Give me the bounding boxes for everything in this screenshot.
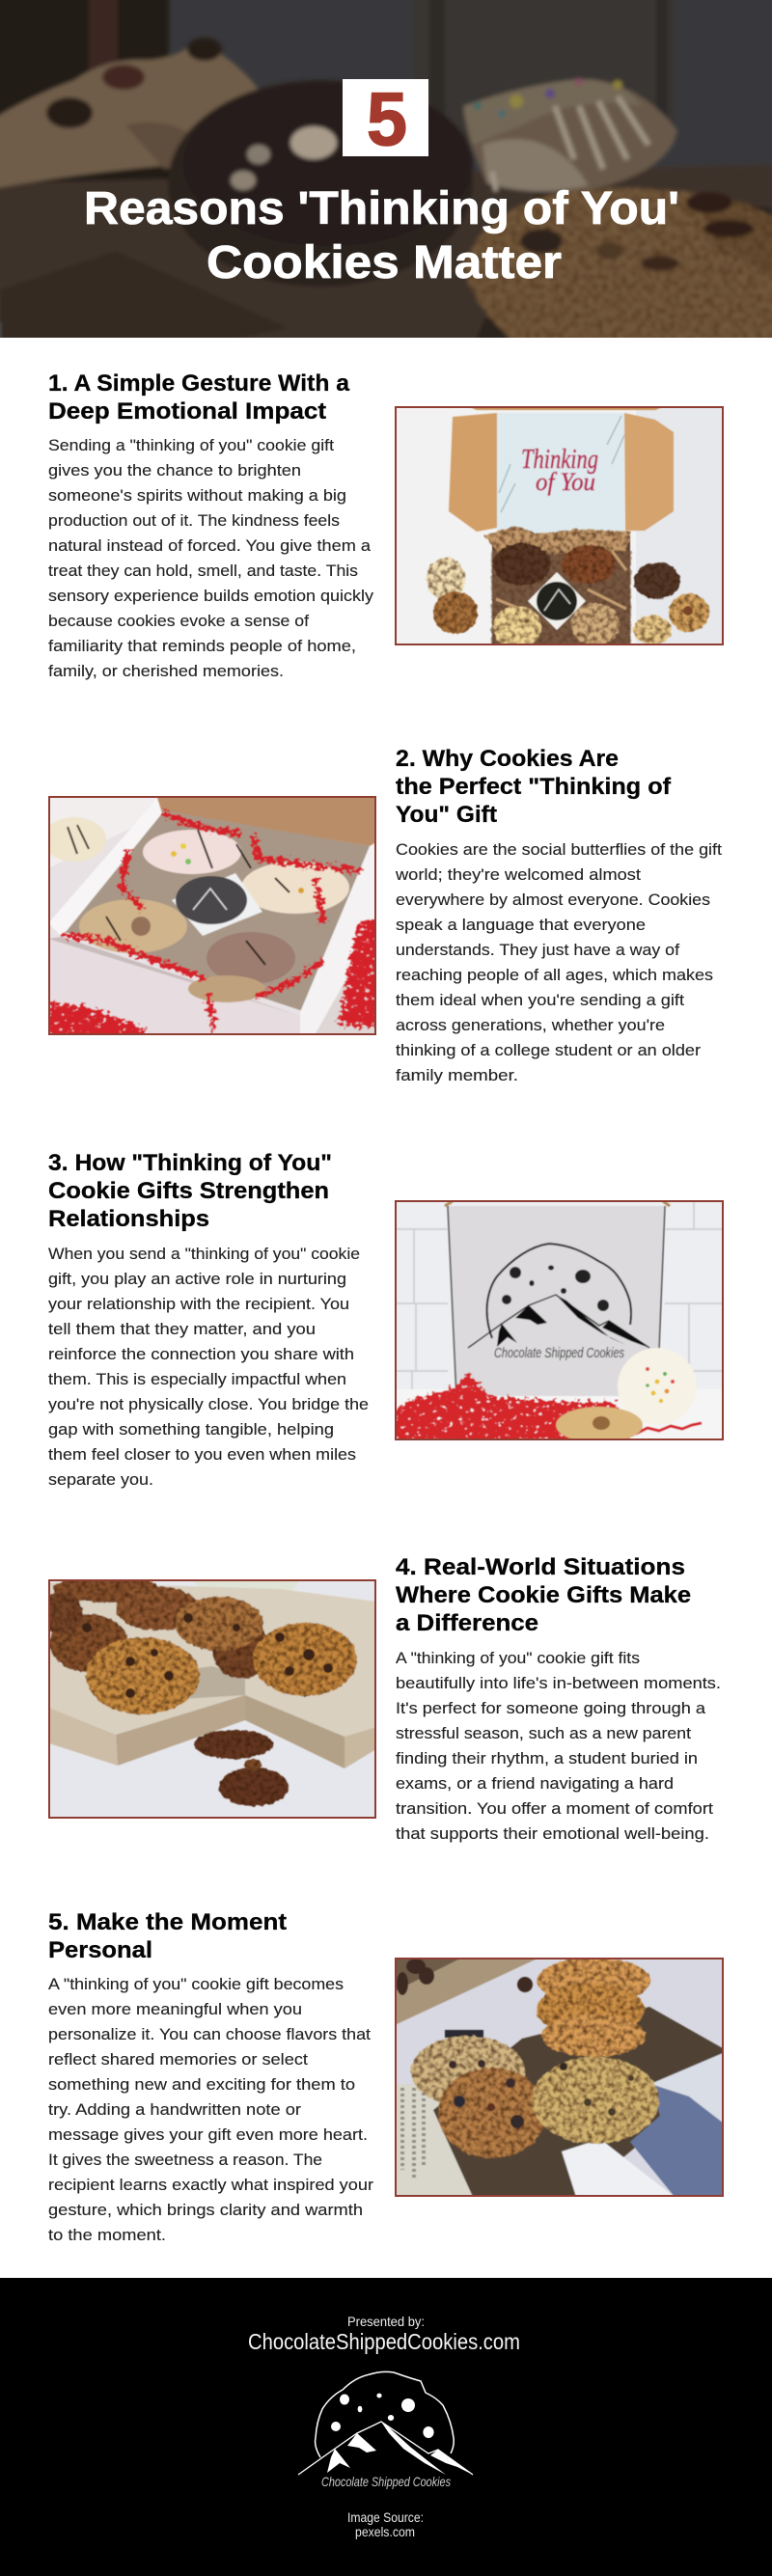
body text 4: transition. You offer a moment of comfort xyxy=(396,1799,713,1818)
body text 5: A "thinking of you" cookie gift becomes xyxy=(48,1975,344,1993)
panel: section 4 xyxy=(41,1554,721,1843)
photo: open box with red crinkle paper xyxy=(48,796,376,1035)
body text 1: natural instead of forced. You give them a xyxy=(48,536,372,555)
title: Reasons 'Thinking of You' xyxy=(84,183,679,234)
photo: white box with logo: Chocolate Shipped Cookies xyxy=(494,1345,624,1361)
heading 4: a Difference xyxy=(396,1610,538,1636)
photo: white box with logo xyxy=(395,1200,724,1440)
body text 1 xyxy=(48,436,374,680)
body text 3: them feel closer to you even when miles xyxy=(48,1445,356,1464)
body text 3: them. This is especially impactful when xyxy=(48,1370,346,1388)
body text 3: you're not physically close. You bridge the xyxy=(48,1395,369,1413)
body text 5 xyxy=(48,1975,373,2244)
body text 4: finding their rhythm, a student buried in xyxy=(396,1749,698,1768)
heading 2: 2. Why Cookies Are xyxy=(396,746,619,772)
body text 5: try. Adding a handwritten note or xyxy=(48,2100,301,2119)
heading 2: the Perfect "Thinking of xyxy=(396,774,672,800)
heading 4: Where Cookie Gifts Make xyxy=(396,1582,691,1608)
body text 3: When you send a "thinking of you" cookie xyxy=(48,1245,360,1263)
body text 3: separate you. xyxy=(48,1470,153,1489)
body text 3: tell them that they matter, and you xyxy=(48,1320,316,1338)
photo: cookies on stone slabs xyxy=(48,1579,376,1819)
presented by label: Presented by: xyxy=(347,2314,425,2329)
heading 5: Personal xyxy=(48,1937,152,1963)
body text 3: gap with something tangible, helping xyxy=(48,1420,334,1439)
body text 2: thinking of a college student or an older xyxy=(396,1041,701,1059)
body text 4: stressful season, such as a new parent xyxy=(396,1724,691,1742)
body text 4: A "thinking of you" cookie gift fits xyxy=(396,1649,640,1667)
heading 4: 4. Real-World Situations xyxy=(396,1554,685,1580)
body text 5: to the moment. xyxy=(48,2226,166,2244)
body text 5: It gives the sweetness a reason. The xyxy=(48,2151,322,2169)
body text 2: Cookies are the social butterflies of the gift xyxy=(396,840,722,859)
body text 5: gesture, which brings clarity and warmth xyxy=(48,2201,363,2219)
body text 2: them ideal when you're sending a gift xyxy=(396,991,684,1009)
logo: cookie and mountains xyxy=(298,2371,473,2475)
body text 1: production out of it. The kindness feels xyxy=(48,511,340,530)
body text 3: reinforce the connection you share with xyxy=(48,1345,354,1363)
body text 5: personalize it. You can choose flavors that xyxy=(48,2025,371,2043)
heading 2 xyxy=(396,746,672,828)
body text 2: world; they're welcomed almost xyxy=(395,865,641,884)
logo wordmark: Chocolate Shipped Cookies xyxy=(321,2474,451,2489)
body text 5: reflect shared memories or select xyxy=(48,2050,308,2069)
body text 3: your relationship with the recipient. You xyxy=(48,1295,349,1313)
body text 2: speak a language that everyone xyxy=(396,916,646,934)
number badge: 5 xyxy=(367,76,407,161)
image source credit xyxy=(347,2509,424,2539)
body text 2: understands. They just have a way of xyxy=(396,941,679,959)
image source credit: pexels.com xyxy=(355,2524,415,2539)
body text 1: familiarity that reminds people of home, xyxy=(48,637,356,655)
photo: stacked cookies with blue towel xyxy=(395,1958,724,2197)
body text 3: gift, you play an active role in nurturing xyxy=(48,1270,346,1288)
body text 5: even more meaningful when you xyxy=(48,2000,302,2018)
body text 4 xyxy=(396,1649,721,1843)
body text 1: because cookies evoke a sense of xyxy=(48,612,309,630)
body text 2: family member. xyxy=(396,1066,518,1084)
body text 2: everywhere by almost everyone. Cookies xyxy=(396,891,710,909)
body text 5: message gives your gift even more heart. xyxy=(48,2125,368,2144)
heading 2: You" Gift xyxy=(396,802,497,828)
body text 4: beautifully into life's in-between moments. xyxy=(396,1674,721,1692)
heading 3: 3. How "Thinking of You" xyxy=(48,1150,332,1176)
body text 4: It's perfect for someone going through a xyxy=(396,1699,706,1717)
body text 5: recipient learns exactly what inspired your xyxy=(48,2176,373,2194)
heading 5 xyxy=(48,1909,287,1963)
photo: thinking of you gift box: of You xyxy=(536,468,595,496)
heading 5: 5. Make the Moment xyxy=(48,1909,287,1935)
body text 1: sensory experience builds emotion quickly xyxy=(48,587,374,605)
title: Cookies Matter xyxy=(207,237,562,288)
heading 1: 1. A Simple Gesture With a xyxy=(48,370,350,397)
image source credit: Image Source: xyxy=(347,2509,424,2525)
panel: section 2 xyxy=(42,746,722,1084)
body text 1: family, or cherished memories. xyxy=(48,662,284,680)
header photo: cookies on wooden board xyxy=(0,0,772,338)
heading 3: Relationships xyxy=(48,1206,209,1232)
heading 3: Cookie Gifts Strengthen xyxy=(48,1178,329,1204)
number badge xyxy=(343,76,428,161)
body text 1: gives you the chance to brighten xyxy=(48,461,301,480)
photo: thinking of you gift box xyxy=(395,406,724,645)
body text 4: that supports their emotional well-being. xyxy=(396,1824,709,1843)
heading 3 xyxy=(48,1150,332,1232)
body text 2 xyxy=(395,840,722,1084)
photo: thinking of you gift box: Thinking xyxy=(521,445,598,475)
body text 1: someone's spirits without making a big xyxy=(48,486,346,505)
panel: section 5 xyxy=(48,1909,724,2244)
body text 2: reaching people of all ages, which makes xyxy=(396,966,713,984)
body text 2: across generations, whether you're xyxy=(396,1016,665,1034)
body text 1: treat they can hold, smell, and taste. This xyxy=(48,562,358,580)
heading 4 xyxy=(396,1554,691,1636)
heading 1 xyxy=(48,370,350,425)
heading 1: Deep Emotional Impact xyxy=(48,398,326,425)
title xyxy=(84,183,679,288)
panel: section 3 xyxy=(48,1150,724,1489)
body text 3 xyxy=(48,1245,369,1489)
header banner xyxy=(0,0,772,347)
body text 1: Sending a "thinking of you" cookie gift xyxy=(48,436,334,454)
panel: section 1 xyxy=(48,370,724,680)
body text 5: something new and exciting for them to xyxy=(48,2075,355,2094)
website name: ChocolateShippedCookies.com xyxy=(248,2329,520,2354)
body text 4: exams, or a friend navigating a hard xyxy=(396,1774,674,1793)
footer panel xyxy=(0,2278,772,2576)
